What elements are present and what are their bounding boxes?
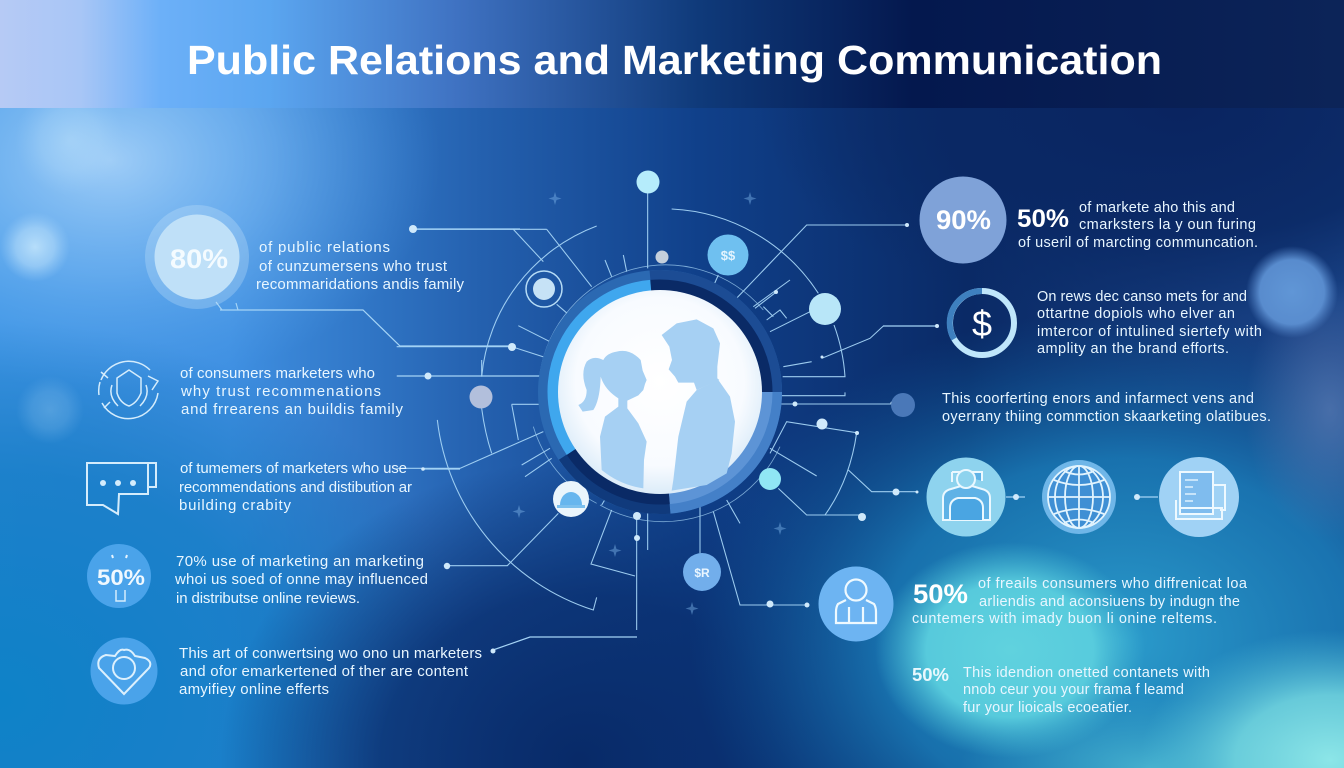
text block: consumers marketers — [180, 365, 404, 418]
stat: 80%: 80% — [170, 244, 228, 274]
text block: brand efforts: ottartne dopiols who elver an — [1037, 306, 1235, 322]
text block: 50% consumers: cuntemers with imady buon li onine reltems. — [912, 611, 1217, 627]
text block: brand efforts: On rews dec canso mets for and — [1037, 289, 1247, 305]
text block: use recommendations: recommendations and distibution ar — [179, 479, 412, 496]
text block: consumers marketers: and frrearens an buildis family — [181, 401, 404, 418]
icon: shield target — [99, 361, 158, 419]
stat: 90% — [920, 176, 1006, 264]
central ring — [543, 275, 777, 509]
text block: communication platforms — [942, 391, 1271, 425]
icon: person badge — [818, 566, 894, 642]
silhouette: man and woman — [578, 319, 735, 491]
text block: online reviews: 70% use of marketing an marketing — [176, 553, 424, 570]
line extensions and connector dots — [216, 223, 1158, 654]
sparkles — [512, 192, 786, 615]
text block: communication platforms: oyerrany thiing commction skaarketing olatibues. — [942, 409, 1271, 425]
text block: 50% consumers: arliendis and aconsiuens by indugn the — [979, 594, 1240, 610]
icon: chat bubble — [87, 463, 156, 514]
text block: use recommendations — [179, 460, 412, 514]
text block: converting: amyifiey online efferts — [179, 681, 329, 698]
text block: 50% marketers — [1017, 200, 1258, 251]
text block: public relations — [256, 239, 464, 293]
icon: globe — [1042, 460, 1116, 534]
text block: consumers marketers: why trust recommenations — [180, 383, 381, 400]
node: dollar badge top — [708, 234, 748, 276]
stat: 50% badge: 50% — [97, 565, 145, 590]
stat: 80% — [145, 205, 249, 309]
text block: brand efforts: imtercor of intulined siertefy with — [1037, 324, 1262, 340]
text block: brand efforts: amplity an the brand efforts. — [1037, 341, 1229, 357]
node: badge bottom — [683, 553, 721, 591]
text block: 50% identity: 50% — [912, 665, 949, 685]
text block: online reviews: in distributse online reviews. — [176, 590, 360, 607]
title: Public Relations and Marketing Communication — [187, 37, 1162, 83]
central disc — [558, 290, 762, 494]
icon: dollar ring: $ — [972, 303, 992, 344]
text block: converting — [179, 645, 482, 698]
network diagram lines — [397, 193, 930, 630]
stat: 90%: 90% — [936, 205, 991, 235]
text block: 50% marketers: of markete aho this and — [1079, 200, 1235, 216]
text block: converting: and ofor emarkertened of ther are content — [180, 663, 469, 680]
node: dollar badge top: $$ — [721, 248, 736, 263]
text block: online reviews: whoi us soed of onne may influenced — [174, 571, 428, 588]
text block: 50% consumers — [912, 576, 1248, 627]
text block: 50% marketers: of useril of marcting communcation. — [1018, 235, 1258, 251]
text block: 50% identity: This idendion onetted contanets with — [963, 665, 1210, 681]
icon: documents — [1159, 457, 1239, 537]
text block: 50% identity: fur your lioicals ecoeatier. — [963, 700, 1132, 716]
text block: brand efforts — [1037, 289, 1262, 357]
text block: consumers marketers: of consumers marketers who — [180, 365, 375, 382]
text block: 50% consumers: of freails consumers who diffrenicat loa — [978, 576, 1248, 592]
node: badge bottom: $R — [694, 566, 710, 580]
text block: 50% marketers: cmarksters la y oun furing — [1079, 217, 1256, 233]
text block: public relations: recommaridations andis family — [256, 276, 464, 293]
network nodes — [470, 170, 915, 517]
text block: use recommendations: building crabity — [179, 497, 292, 514]
text block: 50% identity: nnob ceur you your frama f leamd — [963, 682, 1184, 698]
text block: use recommendations: of tumemers of marketers who use — [180, 460, 407, 477]
text block: public relations: of public relations — [259, 239, 390, 256]
text block: public relations: of cunzumersens who trust — [259, 258, 448, 275]
title band — [0, 0, 1344, 108]
stat: 50% badge — [87, 544, 151, 608]
text block: 50% identity — [912, 665, 1210, 716]
icon: audience — [926, 458, 1006, 536]
text block: 50% consumers: 50% — [913, 579, 968, 609]
icon: dollar ring — [950, 291, 1014, 355]
text block: communication platforms: This coorferting enors and infarmect vens and — [942, 391, 1254, 407]
text block: converting: This art of conwertsing wo ono un marketers — [179, 645, 482, 662]
text block: 50% marketers: 50% — [1017, 205, 1069, 233]
icon: heart badge — [90, 638, 158, 704]
text block: online reviews — [174, 553, 428, 607]
